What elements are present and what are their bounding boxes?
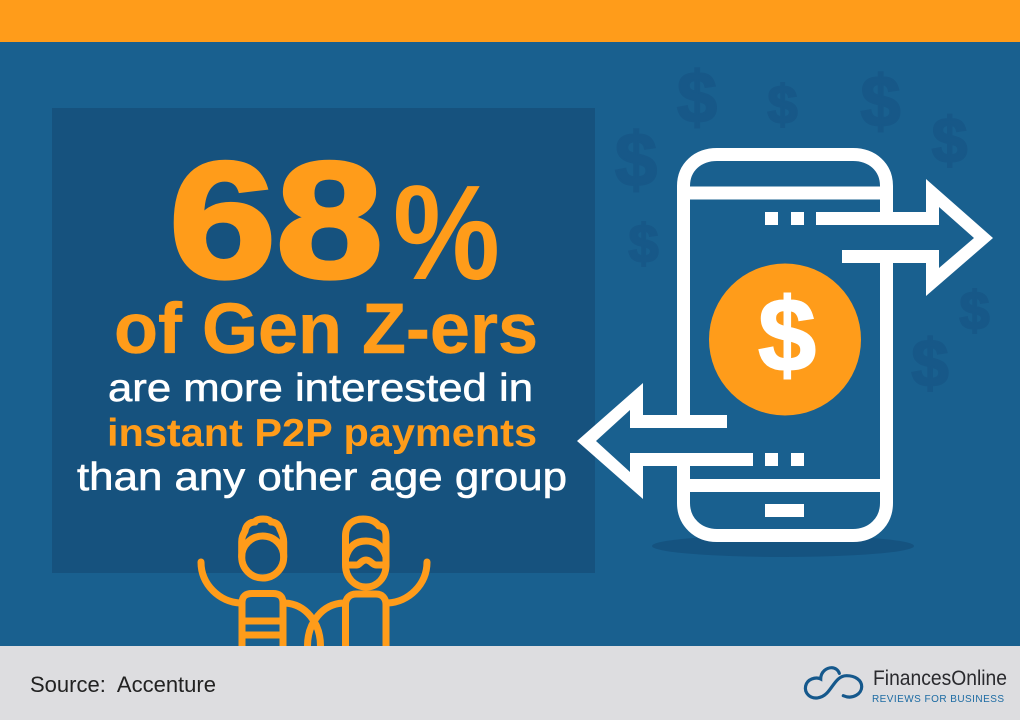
phone shadow <box>652 535 914 557</box>
text block: description: instant P2P payments <box>107 412 537 455</box>
headline statistic: % <box>393 157 500 308</box>
decorative dollar signs: $ <box>959 281 990 341</box>
icon: two people <box>201 519 427 646</box>
decorative dollar signs: $ <box>932 104 967 176</box>
logo cloud icon <box>805 668 862 698</box>
text block: description: than any other age group <box>77 456 567 499</box>
logo: FinancesOnline <box>805 666 1007 705</box>
decorative dollar signs: $ <box>628 214 659 274</box>
arrow: incoming left <box>577 383 753 499</box>
top orange band <box>0 0 1020 42</box>
source text: Source: Accenture <box>30 672 216 697</box>
logo wordmark: FinancesOnline <box>873 666 1007 690</box>
footer bar <box>0 646 1020 720</box>
decorative dollar signs: $ <box>860 62 901 142</box>
text block: description: are more interested in <box>108 367 533 410</box>
right person <box>308 519 427 646</box>
decorative dollar signs: $ <box>677 58 717 138</box>
icon: smartphone <box>684 154 886 536</box>
headline statistic <box>169 128 500 312</box>
headline statistic: 68 <box>169 128 383 312</box>
icon: orange coin with dollar <box>709 264 861 416</box>
logo tagline: REVIEWS FOR BUSINESS <box>872 694 1004 705</box>
icon: orange coin with dollar: $ <box>758 278 816 394</box>
decorative dollar signs <box>615 58 990 401</box>
panel: headline background <box>52 108 595 573</box>
arrow: outgoing right <box>816 179 993 296</box>
subheading: of Gen Z-ers: of Gen Z-ers <box>114 290 538 369</box>
left person <box>201 519 320 646</box>
text block: description <box>77 367 567 499</box>
decorative dollar signs: $ <box>911 326 949 401</box>
decorative dollar signs: $ <box>615 118 657 203</box>
decorative dollar signs: $ <box>767 75 798 135</box>
